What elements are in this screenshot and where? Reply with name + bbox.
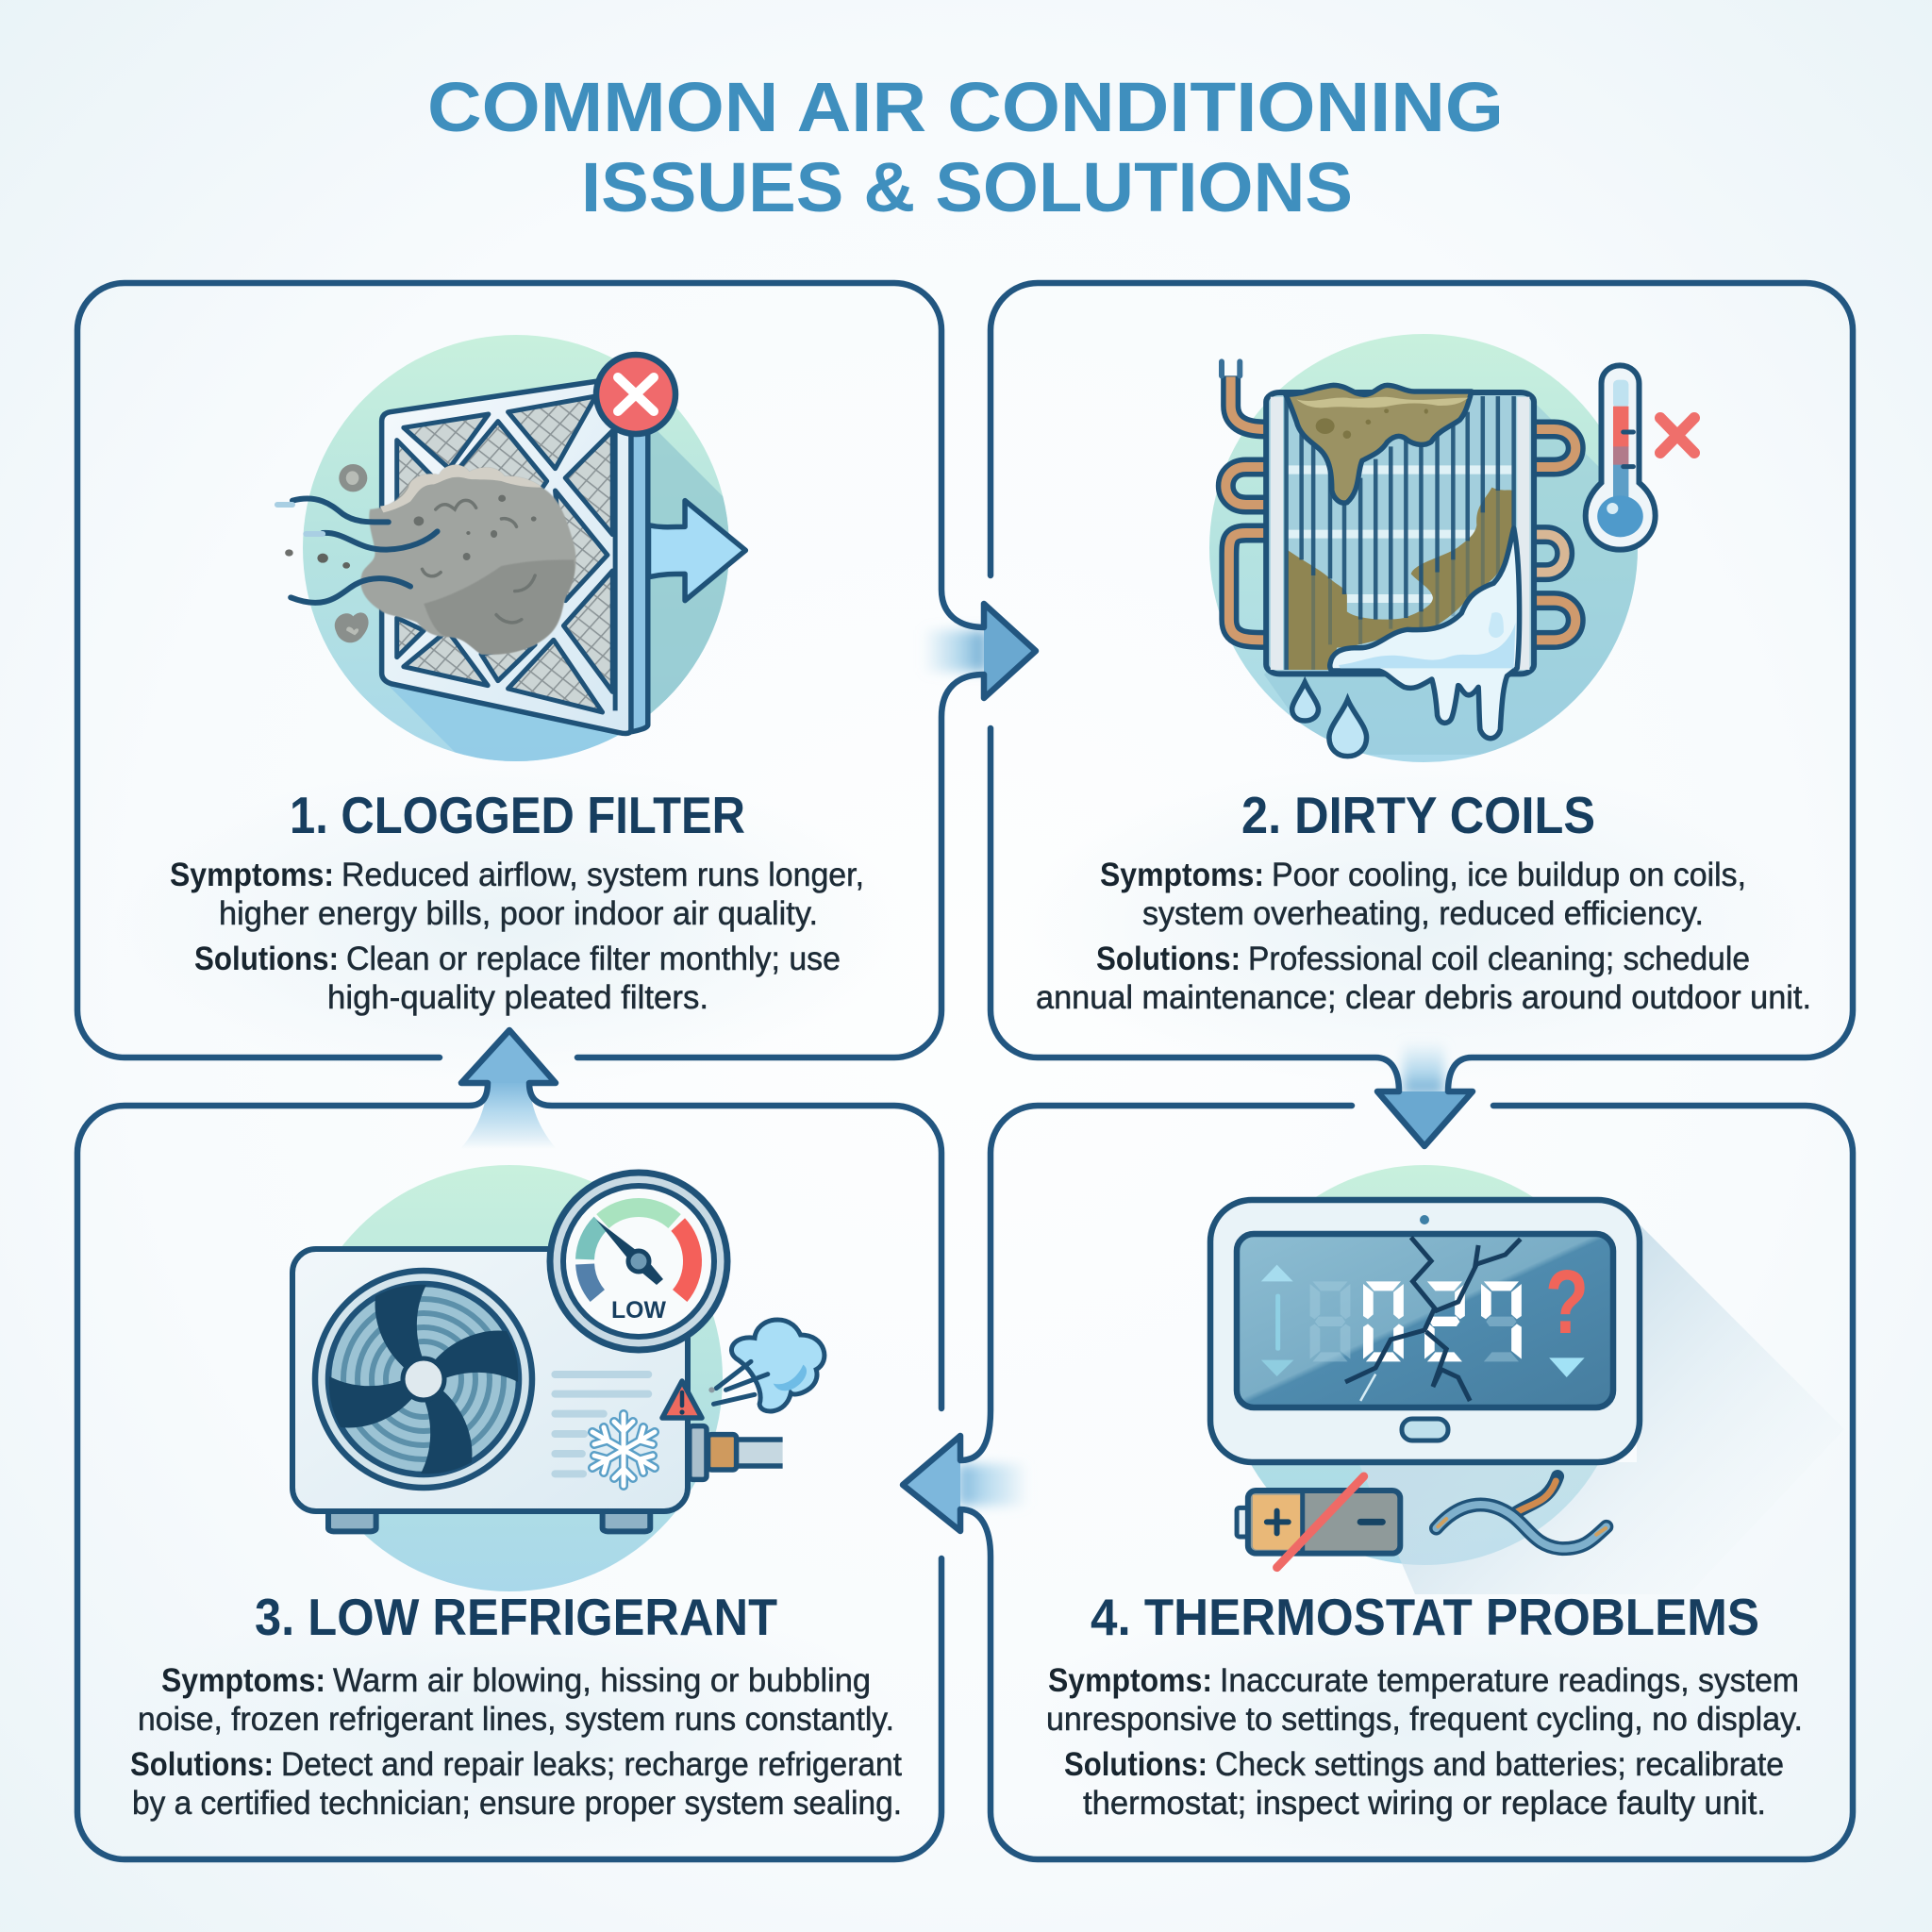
symptoms: Reduced airflow, system runs longer, [341, 857, 864, 893]
question mark: ? [1545, 1252, 1589, 1353]
circle backdrop [296, 1165, 723, 1591]
circle backdrop [303, 335, 729, 761]
frayed wire [1436, 1476, 1607, 1549]
panel 3 outline with up arrow [77, 1030, 941, 1859]
gauge label: LOW [611, 1297, 666, 1324]
arrow head fill: down [1377, 1091, 1473, 1146]
panel 4 text [1046, 1588, 1803, 1822]
solutions: Detect and repair leaks; recharge refrigerant [281, 1746, 902, 1783]
icon: low refrigerant [292, 1165, 824, 1591]
filter shadow [387, 396, 755, 764]
refrigerant leak cloud [708, 1320, 824, 1411]
symptoms: Inaccurate temperature readings, system [1220, 1662, 1799, 1699]
symptoms: unresponsive to settings, frequent cycling, no display. [1046, 1701, 1803, 1738]
arrow glow: refrigerant to filter [460, 1081, 557, 1149]
dirt on top of coil [1286, 385, 1472, 503]
screen [1237, 1234, 1613, 1407]
symptoms: higher energy bills, poor indoor air quality. [219, 895, 818, 932]
symptoms [1100, 857, 1746, 932]
air filter [382, 380, 648, 733]
warning triangle [662, 1381, 702, 1418]
dust clump [360, 465, 576, 655]
vent lines [555, 1374, 648, 1474]
symptoms: Symptoms: [170, 857, 334, 893]
ice buildup [1330, 528, 1520, 739]
arrow glow: thermostat to refrigerant [958, 1464, 1028, 1506]
pressure gauge [550, 1173, 727, 1350]
panel 1 outline with right arrow [77, 283, 1036, 1058]
arrow head fill: up [461, 1030, 556, 1083]
icon: red x badge [596, 355, 675, 434]
icon: dirty coils [1209, 334, 1698, 762]
arrow glow: filter to coils [923, 630, 987, 672]
solutions: Solutions: [194, 941, 339, 977]
solutions [1036, 941, 1811, 1016]
panel 2 outline with down arrow [991, 283, 1853, 1146]
title: ISSUES & SOLUTIONS [581, 148, 1353, 226]
heading: 1. CLOGGED FILTER [290, 786, 745, 844]
camera dot [1420, 1215, 1429, 1224]
red x mark [1660, 418, 1694, 453]
panel 3 text [130, 1588, 902, 1822]
symptoms: system overheating, reduced efficiency. [1142, 895, 1704, 932]
outdoor unit feet [328, 1507, 650, 1531]
circle backdrop [1209, 334, 1638, 762]
cracks [1345, 1238, 1521, 1401]
panel 1 text [170, 786, 864, 1016]
symptoms: noise, frozen refrigerant lines, system runs constantly. [138, 1701, 894, 1738]
symptoms [170, 857, 864, 932]
pipe connector [690, 1426, 783, 1479]
symptoms: Warm air blowing, hissing or bubbling [333, 1662, 871, 1699]
thermostat body [1210, 1200, 1640, 1462]
solutions [130, 1746, 902, 1822]
symptoms: Symptoms: [1100, 857, 1264, 893]
heading: 4. THERMOSTAT PROBLEMS [1091, 1588, 1759, 1646]
heading: 2. DIRTY COILS [1241, 786, 1595, 844]
arrow glow: coils to thermostat [1403, 1041, 1444, 1094]
icon: thermostat [1210, 1165, 1844, 1594]
solutions: Clean or replace filter monthly; use [346, 941, 841, 977]
solutions [194, 941, 841, 1016]
coil shadow [1264, 405, 1638, 755]
arrow head fill: right [984, 604, 1036, 698]
title: COMMON AIR CONDITIONING [427, 68, 1504, 146]
symptoms: Symptoms: [1048, 1662, 1212, 1699]
thermostat shadow [1358, 1222, 1844, 1594]
symptoms [138, 1662, 894, 1738]
symptoms: Poor cooling, ice buildup on coils, [1272, 857, 1746, 893]
water drops [1292, 682, 1367, 757]
symptoms: Symptoms: [161, 1662, 325, 1699]
icon: clogged filter [277, 335, 755, 764]
copper pipes [1222, 361, 1575, 640]
snowflake [592, 1414, 655, 1486]
outflow arrow [648, 501, 745, 601]
coil body with fins [1266, 392, 1534, 674]
solutions: Check settings and batteries; recalibrate [1215, 1746, 1784, 1783]
arrow head fill: left [903, 1436, 960, 1531]
circle backdrop [1224, 1165, 1624, 1565]
solutions: Solutions: [130, 1746, 274, 1783]
heading: 3. LOW REFRIGERANT [255, 1588, 777, 1646]
thermometer [1586, 365, 1656, 550]
solutions: annual maintenance; clear debris around outdoor unit. [1036, 979, 1811, 1016]
solutions: thermostat; inspect wiring or replace faulty unit. [1083, 1785, 1766, 1822]
solutions: high-quality pleated filters. [327, 979, 708, 1016]
fan [315, 1271, 532, 1488]
battery with slash [1237, 1476, 1400, 1568]
solutions [1064, 1746, 1784, 1822]
solutions: Solutions: [1064, 1746, 1208, 1783]
panel 4 outline with left arrow [903, 1106, 1853, 1859]
home button [1402, 1419, 1448, 1441]
outdoor unit body [292, 1249, 688, 1511]
solutions: by a certified technician; ensure proper system sealing. [132, 1785, 902, 1822]
solutions: Professional coil cleaning; schedule [1248, 941, 1750, 977]
title [427, 68, 1504, 226]
symptoms [1046, 1662, 1803, 1738]
segment digits and controls [1261, 1238, 1585, 1401]
needle [596, 1220, 663, 1285]
airflow lines and dust particles [277, 464, 438, 642]
solutions: Solutions: [1096, 941, 1241, 977]
panel 2 text [1036, 786, 1811, 1016]
